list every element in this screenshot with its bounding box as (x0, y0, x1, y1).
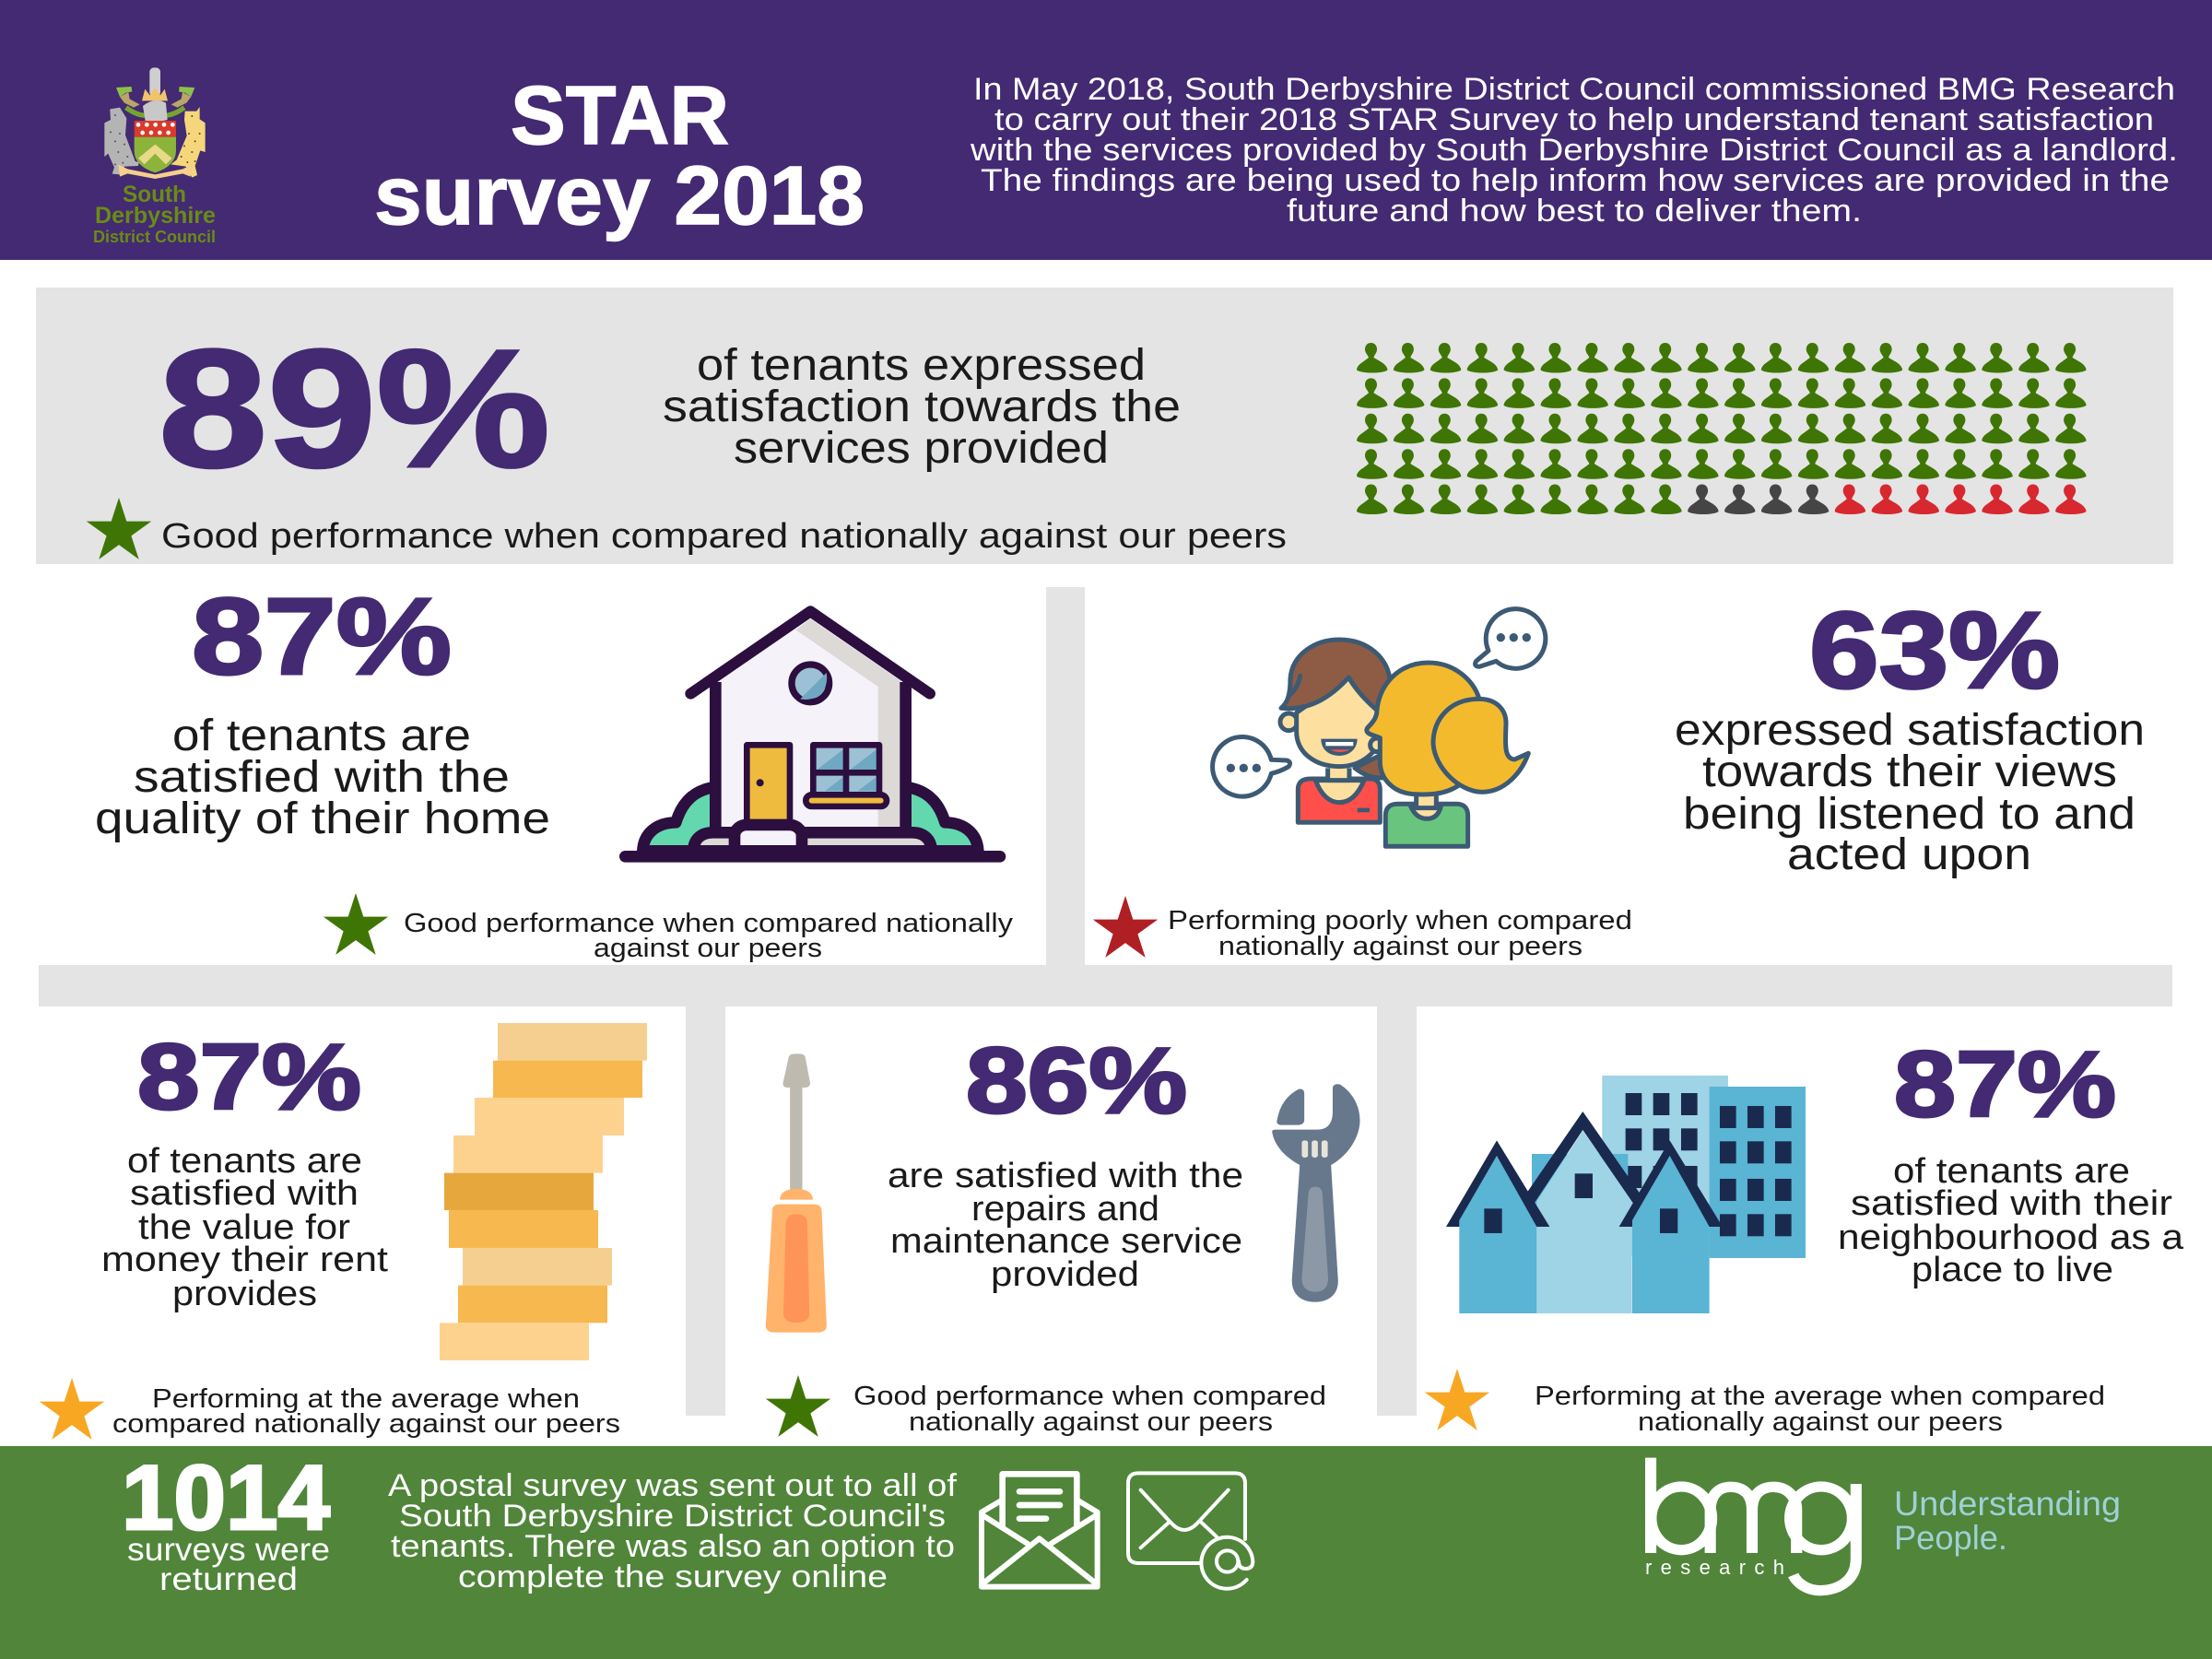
rating text: against our peers (594, 934, 822, 963)
statement text: of tenants are (1893, 1152, 2130, 1191)
statement text: maintenance service (890, 1222, 1242, 1261)
statement text: repairs and (971, 1190, 1159, 1229)
icon: email envelope (1128, 1473, 1253, 1589)
icon: wrench (1272, 1084, 1359, 1302)
statement text: provides (172, 1275, 317, 1313)
method text: A postal survey was sent out to all of (388, 1468, 958, 1503)
council logo (93, 67, 216, 246)
rating text (112, 1384, 620, 1439)
statement text: acted upon (1787, 830, 2031, 879)
rating text (853, 1382, 1326, 1437)
statement text: satisfied with the (134, 753, 510, 802)
big figure 87%: 87% (137, 1026, 361, 1129)
panel: value for money (40, 1023, 647, 1440)
rating text: Good performance when compared nationally (404, 909, 1014, 938)
council name: Derbyshire (95, 203, 216, 229)
statement text: being listened to and (1683, 790, 2136, 839)
crest (104, 67, 206, 179)
big figure 63%: 63% (1809, 590, 2060, 712)
header band (0, 0, 2212, 260)
surveys returned figure: 1014 (122, 1446, 330, 1548)
statement text (888, 1157, 1243, 1294)
icon: screwdriver (766, 1053, 827, 1333)
icon: stack of coins (440, 1023, 647, 1360)
method text: South Derbyshire District Council's (399, 1499, 946, 1534)
icon: green star (87, 498, 151, 559)
surveys returned figure: surveys were (127, 1532, 330, 1568)
statement text (1838, 1152, 2184, 1289)
big figure 87%: 87% (1894, 1033, 2116, 1136)
introduction text: to carry out their 2018 STAR Survey to help understand tenant satisfaction (994, 102, 2154, 137)
icon: green star (766, 1375, 830, 1437)
rating text: nationally against our peers (909, 1407, 1273, 1437)
title: STAR (511, 70, 729, 162)
big figure 87%: 87% (192, 576, 452, 698)
strapline (1894, 1485, 2121, 1557)
icon: orange star (40, 1378, 104, 1440)
research wordmark: research (1645, 1556, 1784, 1579)
method text: tenants. There was also an option to (391, 1529, 955, 1564)
icon: two women talking (1213, 609, 1546, 846)
method text (388, 1468, 958, 1594)
rating text: nationally against our peers (1218, 932, 1583, 961)
rating text (1535, 1382, 2105, 1437)
introduction text (970, 72, 2178, 229)
introduction text: with the services provided by South Derbyshire District Council as a landlord. (970, 133, 2178, 168)
rating text (1168, 906, 1632, 961)
panel: quality of home (95, 576, 1014, 963)
statement text: provided (991, 1255, 1139, 1294)
rating text (404, 909, 1014, 963)
strapline: People. (1894, 1519, 2007, 1557)
surveys returned figure: returned (159, 1561, 298, 1597)
icon: house (625, 611, 1000, 856)
introduction text: future and how best to deliver them. (1287, 194, 1862, 229)
statement text: of tenants are (172, 712, 471, 760)
rating text: nationally against our peers (1638, 1407, 2003, 1437)
rating text: Performing at the average when compared (1535, 1382, 2105, 1411)
rating text: Good performance when compared nationally against our peers (161, 517, 1287, 556)
icon: green star (324, 893, 388, 955)
icon: houses and flats (1446, 1076, 1806, 1313)
statement text (101, 1142, 388, 1313)
statement text: services provided (734, 424, 1109, 473)
title: survey 2018 (374, 150, 865, 242)
statement text: expressed satisfaction (1675, 706, 2145, 755)
method text: complete the survey online (458, 1559, 888, 1594)
strapline: Understanding (1894, 1485, 2121, 1523)
icon: open envelope (982, 1474, 1098, 1587)
panel: overall satisfaction (36, 288, 2173, 564)
statement text (663, 341, 1181, 473)
statement text: satisfaction towards the (663, 382, 1181, 431)
statement text (1675, 706, 2145, 879)
BMG research logo (1645, 1458, 2121, 1591)
statement text: satisfied with (130, 1174, 359, 1213)
title (374, 70, 865, 242)
statement text: of tenants expressed (697, 341, 1146, 390)
rating text: Good performance when compared (853, 1382, 1326, 1411)
council name: South (123, 182, 186, 207)
panel: views listened to (1093, 590, 2145, 961)
statement text: neighbourhood as a (1838, 1218, 2184, 1257)
statement text: money their rent (101, 1241, 388, 1279)
statement text: of tenants are (127, 1142, 362, 1181)
statement text: quality of their home (95, 794, 550, 843)
introduction text: The findings are being used to help inform how services are provided in the (981, 163, 2170, 198)
big figure 86%: 86% (966, 1030, 1187, 1133)
rating text: compared nationally against our peers (112, 1409, 620, 1439)
council name (93, 182, 216, 246)
introduction text: In May 2018, South Derbyshire District Council commissioned BMG Research (973, 72, 2175, 107)
icon: red star (1093, 896, 1158, 958)
footer band (0, 1446, 2212, 1659)
council name: District Council (93, 228, 216, 246)
icon: orange star (1425, 1369, 1489, 1430)
rating text: Performing at the average when (152, 1384, 580, 1414)
big figure 89%: 89% (159, 314, 550, 502)
statement text: the value for (138, 1208, 350, 1247)
surveys returned figure (122, 1446, 330, 1597)
panel: repairs and maintenance (766, 1030, 1359, 1437)
pictogram: 100 people (1357, 343, 2087, 514)
statement text: are satisfied with the (888, 1157, 1243, 1195)
statement text: towards their views (1702, 747, 2117, 796)
bmg letters (1651, 1458, 1856, 1591)
statement text: place to live (1912, 1251, 2113, 1289)
statement text (95, 712, 550, 843)
rating text: Performing poorly when compared (1168, 906, 1632, 935)
statement text: satisfied with their (1851, 1184, 2172, 1223)
panel: neighbourhood (1425, 1033, 2184, 1437)
